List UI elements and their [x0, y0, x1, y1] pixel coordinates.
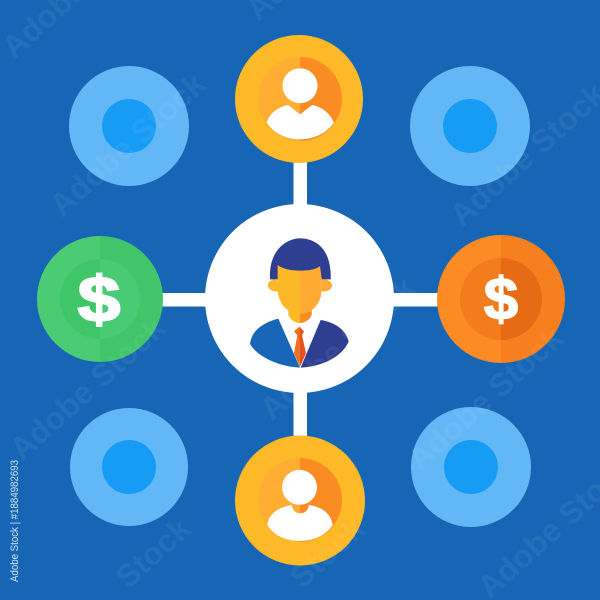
stock watermark: Adobe Stock: [401, 319, 570, 477]
stock watermark: Stock: [109, 510, 198, 595]
right shoulder: [301, 320, 349, 368]
necktie: [294, 327, 300, 367]
right node: orange dollar: $: [484, 265, 518, 332]
blue node: bottom right: [411, 407, 531, 527]
stock watermark: Adobe Stock: [3, 309, 172, 467]
stock watermark: Adobe Stock: [43, 65, 212, 223]
blue node: top left: [69, 66, 189, 186]
hair: [270, 238, 331, 279]
stock watermark: Stock: [283, 510, 372, 595]
face: [278, 265, 300, 314]
stock image credit: Adobe Stock | #1884982693: [9, 460, 21, 582]
central hub: businessman: [205, 204, 394, 393]
connectors between hub and nodes: [160, 160, 440, 440]
ears: [268, 279, 278, 291]
blue node: bottom left: [70, 408, 188, 526]
right node: orange dollar: [437, 235, 565, 363]
top node: person icon: [235, 35, 363, 163]
left node: green dollar: $: [78, 263, 120, 335]
blue node: top right: [410, 66, 530, 186]
bottom node: person icon: [235, 436, 365, 566]
left node: green dollar: [37, 236, 163, 362]
left shoulder: [250, 319, 300, 368]
neck: [288, 308, 300, 323]
stock watermark: Adobe Stock: [253, 269, 422, 427]
